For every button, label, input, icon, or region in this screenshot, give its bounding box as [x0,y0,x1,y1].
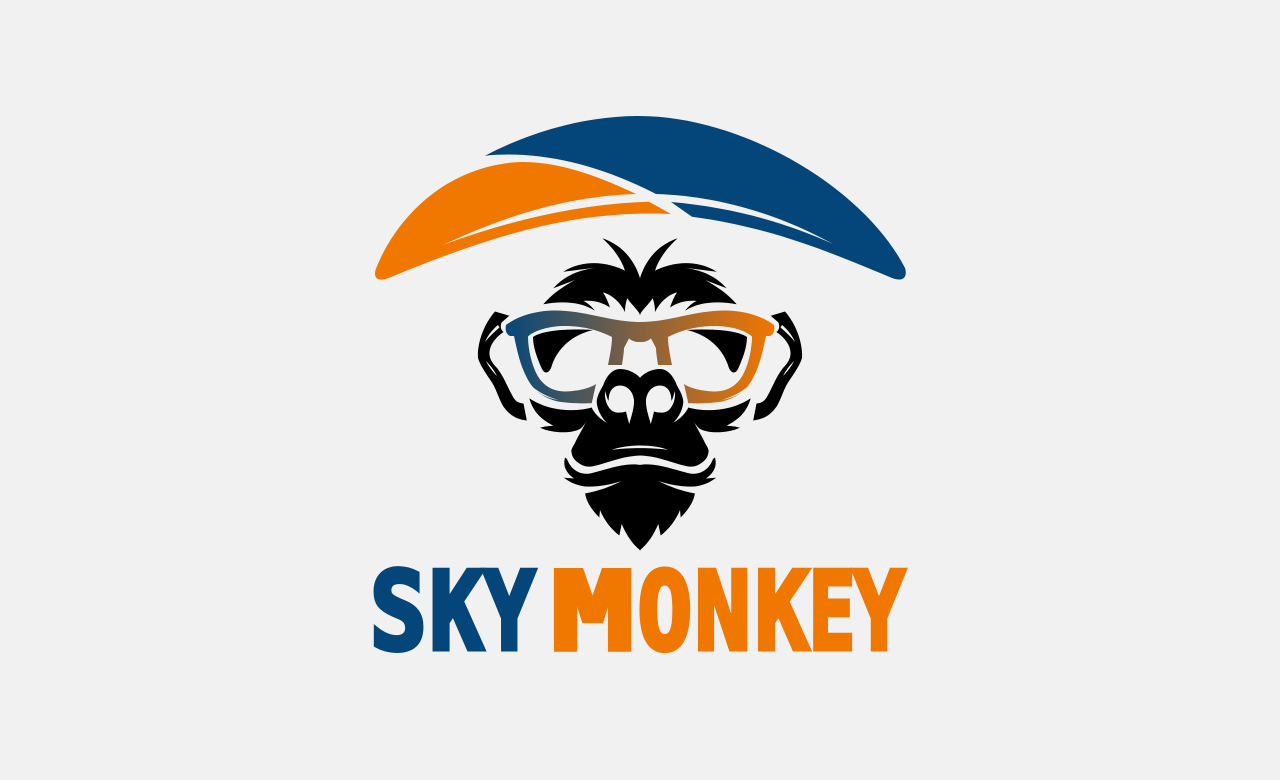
icon: monkey head [478,238,802,551]
word: MONKEY: Y [853,550,905,676]
left eye shadow [533,330,593,372]
word: SKY: K [430,550,484,675]
icon: blue paraglider wing [485,116,906,280]
word: MONKEY [551,548,905,676]
left hair [543,238,640,315]
right frame highlight [722,386,748,400]
word: MONKEY: E [809,550,855,676]
word: SKY [370,549,535,676]
word: MONKEY: K [755,550,809,675]
right nostril [646,386,675,424]
left nostril [605,386,634,424]
icon: orange paraglider wing [375,162,671,280]
mouth line [612,446,668,450]
word: MONKEY: M [551,549,634,675]
word: MONKEY: N [695,549,751,675]
right eye shadow [687,330,747,372]
word: SKY: Y [483,550,535,676]
left ear [478,312,527,420]
right hair [640,238,737,315]
glasses frame [506,310,774,403]
left face and nose [529,369,640,467]
right face and nose [640,369,751,467]
right ear [753,312,802,420]
left frame highlight [532,386,558,400]
word: MONKEY: O [637,548,692,675]
right moustache and beard [640,458,716,550]
word: SKY: S [370,549,427,675]
brand name [370,548,905,676]
left moustache and beard [564,458,640,550]
